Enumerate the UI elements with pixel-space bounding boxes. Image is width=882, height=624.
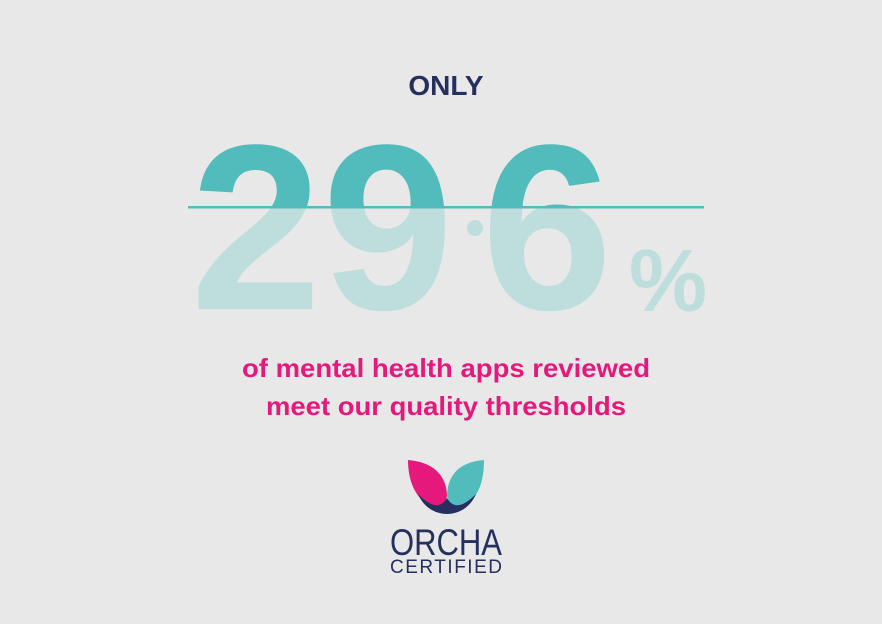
subtitle text [242, 353, 650, 421]
big number 29.6%: 2 [190, 96, 322, 360]
logo text: ORCHA [390, 522, 502, 563]
big number 29.6%: 6 [481, 96, 613, 360]
logo: ORCHA certified [390, 460, 502, 578]
subtitle text: meet our quality thresholds [266, 391, 626, 421]
infographic [188, 76, 705, 573]
big number 29.6%: % [629, 231, 707, 330]
icon: petals [408, 460, 484, 514]
big number 29.6%: 9 [322, 96, 454, 360]
logo: ORCHA certified: CERTIFIED [390, 557, 502, 578]
subtitle text: of mental health apps reviewed [242, 353, 650, 383]
big number 29.6%: 9 [322, 96, 454, 360]
big number 29.6%: 2 [190, 96, 322, 360]
big number 29.6% [188, 144, 705, 312]
heading: ONLY: ONLY [408, 70, 484, 101]
big number 29.6%: 6 [481, 96, 613, 360]
